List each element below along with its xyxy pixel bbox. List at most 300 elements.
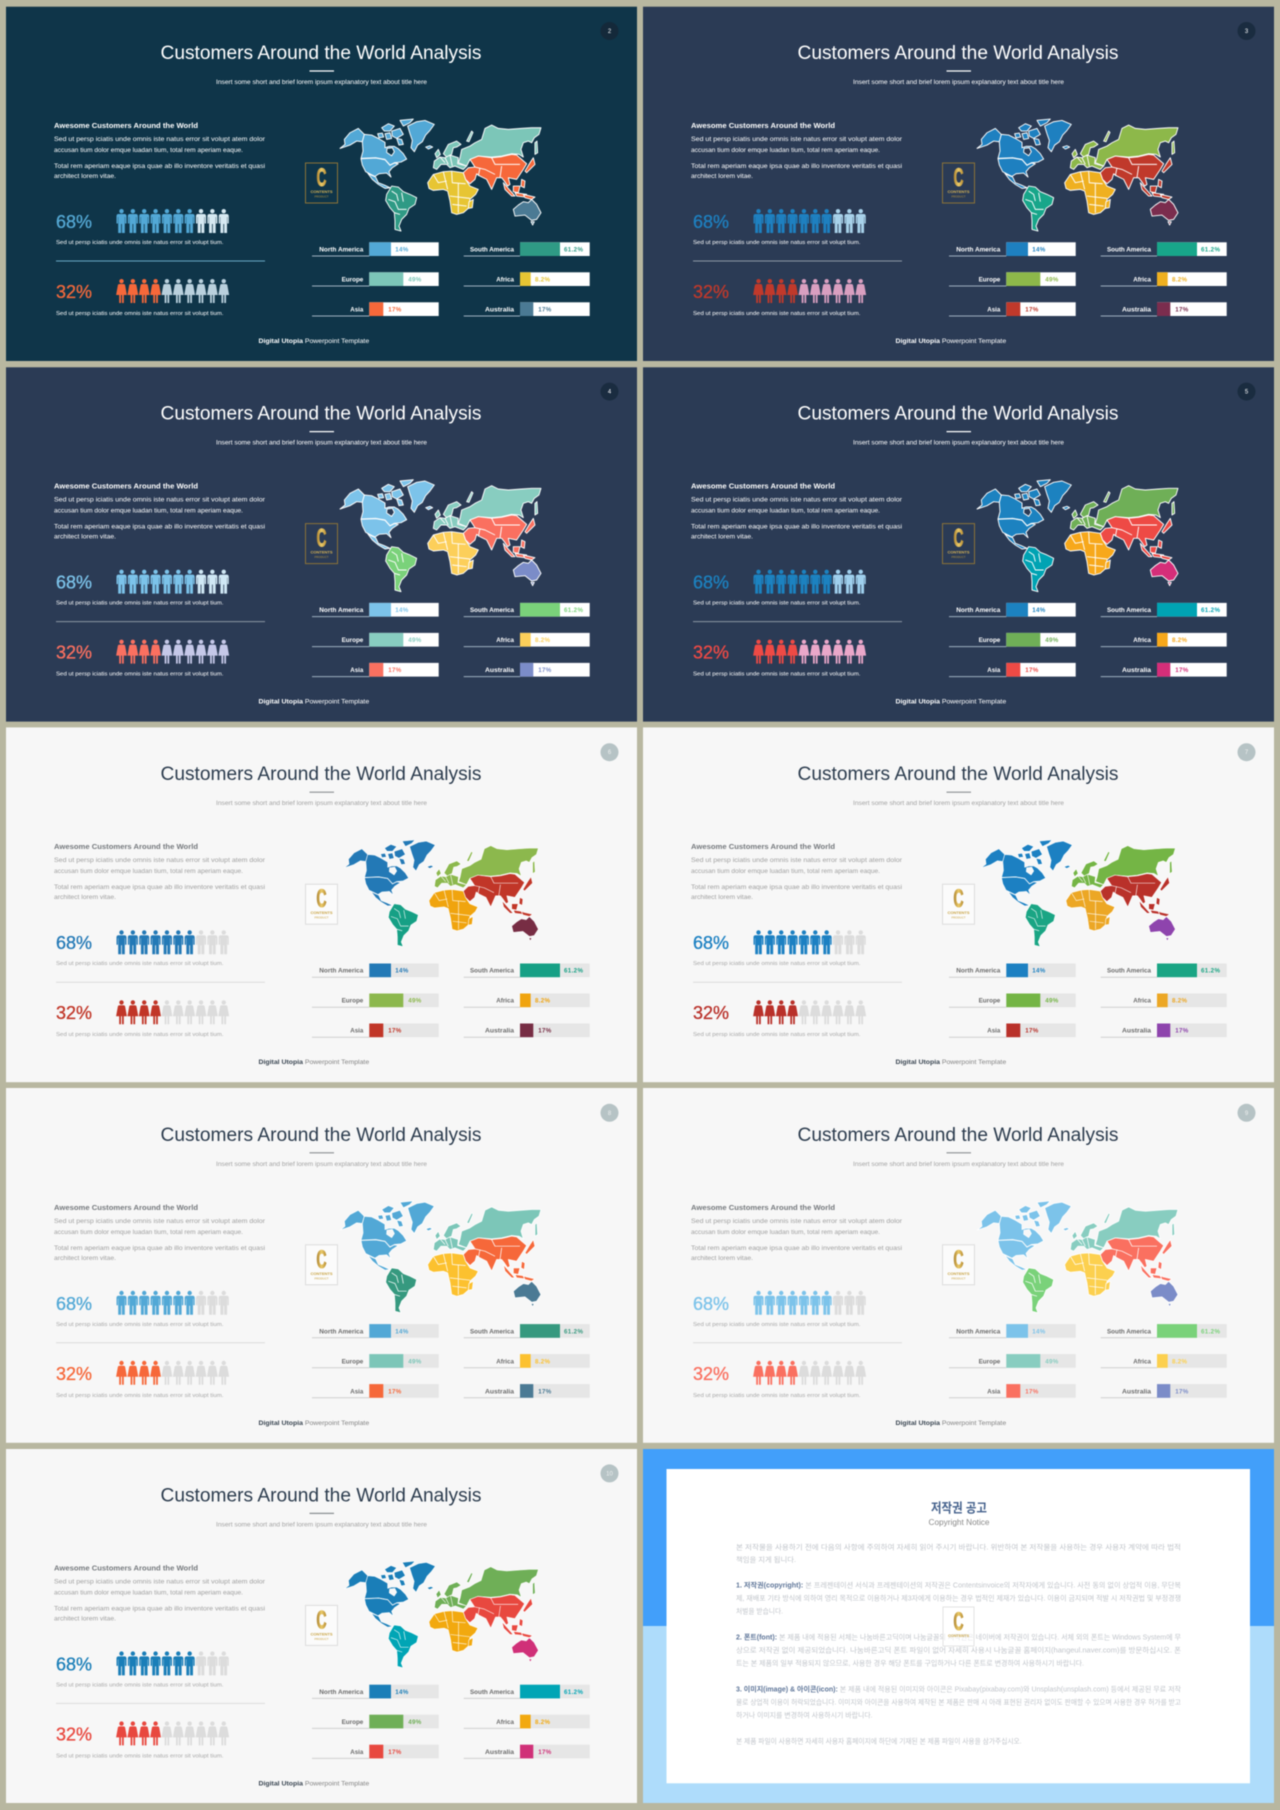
bar: Africa: 8.2% — [1172, 637, 1187, 644]
logo: CONTENTS — [948, 1271, 970, 1276]
bar: Asia: 17% — [388, 667, 402, 674]
world map — [344, 1561, 538, 1668]
bar: Europe — [949, 272, 1076, 286]
notice body: 물로 상업적 이용이 허락되었습니다. 이미지와 아이콘을 사용하여 제작된 본 제품은 판매 시 아래 표현된 권리자 없이도 판매할 수 있으며 사용한 경우 허가를 받고 — [736, 1697, 1182, 1706]
logo watermark: C — [954, 1608, 964, 1636]
caption: Sed ut persp iciatis unde omnis iste natus error sit volupt tium. — [56, 1032, 224, 1038]
bar: North America: North America — [319, 1328, 364, 1335]
footer: Digital Utopia Powerpoint Template — [896, 1059, 1007, 1066]
bar: Europe: Europe — [342, 637, 364, 644]
footer: Digital Utopia Powerpoint Template — [896, 1420, 1007, 1427]
text block: architect lorem vitae. — [54, 1616, 116, 1622]
bar: North America — [312, 964, 439, 977]
logo: PRODUCT — [314, 194, 329, 198]
bar: North America — [949, 242, 1076, 256]
bar: Asia: Asia — [350, 1388, 364, 1395]
text block — [54, 482, 265, 541]
page number: 10 — [606, 1471, 613, 1477]
text block — [691, 842, 902, 901]
logo: CONTENTS — [310, 910, 333, 915]
subtitle: Insert some short and brief lorem ipsum explanatory text about title here — [216, 800, 428, 807]
notice body: 처벌을 받습니다. — [736, 1607, 783, 1616]
text block: Total rem aperiam eaque ipsa quae ab illo inventore veritatis et quasi — [54, 1606, 265, 1612]
notice body: 제, 재배포 기타 방식에 의하여 영리 목적으로 이용하거나 제3자에게 이용하는 경우 법적인 제재가 있습니다. 이용이 금지되며 적발 시 저작권법 및 부정경쟁 — [736, 1594, 1181, 1603]
bar: Europe: Europe — [342, 1358, 364, 1365]
stat: 68%: 68% — [56, 932, 92, 953]
text block: Awesome Customers Around the World — [54, 482, 198, 491]
title: Customers Around the World Analysis — [798, 43, 1118, 64]
logo: PRODUCT — [952, 1276, 966, 1280]
bar: Europe: 49% — [1045, 998, 1059, 1005]
bar: South America: South America — [470, 1328, 514, 1335]
caption: Sed ut persp iciatis unde omnis iste natus error sit volupt tium. — [56, 601, 224, 607]
bar: Europe — [949, 1354, 1076, 1368]
logo: CONTENTS — [948, 910, 970, 915]
bar: Europe — [312, 1715, 439, 1728]
stat: 68%: 68% — [56, 1653, 92, 1674]
bar: South America: 61.2% — [564, 607, 583, 614]
world map — [981, 840, 1175, 947]
bar: North America: North America — [956, 968, 1001, 975]
world map — [340, 119, 541, 231]
title rule — [310, 70, 334, 72]
stat: 32%: 32% — [693, 642, 729, 663]
page number — [600, 1464, 618, 1482]
bar: Africa: Africa — [496, 1719, 514, 1726]
text block: architect lorem vitae. — [691, 1256, 753, 1262]
bar: Africa — [464, 994, 590, 1007]
page number — [600, 1104, 618, 1122]
bar: Africa: Africa — [1133, 1358, 1151, 1365]
bar: Africa: 8.2% — [535, 637, 550, 644]
subtitle: Insert some short and brief lorem ipsum explanatory text about title here — [216, 1161, 428, 1168]
text block — [691, 121, 902, 180]
logo — [306, 524, 338, 564]
bar: Australia: 17% — [538, 306, 552, 314]
logo: C — [954, 164, 964, 192]
stat: 68%: 68% — [56, 1293, 92, 1314]
subtitle: Insert some short and brief lorem ipsum explanatory text about title here — [853, 1161, 1065, 1168]
icon row: men — [754, 570, 866, 594]
bar: North America: North America — [956, 607, 1001, 614]
notice body: 1. 저작권(copyright): 본 프레젠테이션 서식과 프레젠테이션의 저작권은 Contentsinvoice의 저작자에게 있습니다. 사전 동의 없이 상업적 이용, 무단복 — [736, 1581, 1182, 1590]
title rule — [946, 70, 971, 72]
bar: South America: 61.2% — [1201, 607, 1220, 614]
text block: accusan tium dolor emque luadan tium, total rem aperiam eaque. — [54, 148, 243, 154]
stat: 32%: 32% — [56, 1363, 92, 1384]
bar: South America — [1101, 1324, 1227, 1338]
bar: Australia: 17% — [1175, 306, 1189, 314]
text block: Awesome Customers Around the World — [691, 482, 835, 491]
bar: North America: North America — [319, 1689, 364, 1696]
bar: Australia: 17% — [538, 1388, 552, 1395]
bar: Europe — [312, 1354, 439, 1368]
bar: Australia: Australia — [485, 1749, 514, 1756]
bar: Africa — [1101, 994, 1227, 1007]
logo: PRODUCT — [314, 555, 329, 559]
panel: slide 8 — [6, 1088, 637, 1443]
page number — [600, 383, 618, 401]
bar: South America — [464, 242, 590, 256]
caption: Sed ut persp iciatis unde omnis iste natus error sit volupt tium. — [56, 1753, 224, 1759]
bar: Asia — [312, 1384, 439, 1398]
page number — [1238, 1104, 1256, 1122]
bar: Africa: Africa — [496, 1358, 514, 1365]
bar: Europe: 49% — [1045, 276, 1059, 284]
bar: Australia: Australia — [485, 1388, 514, 1395]
bar: Asia: 17% — [388, 1028, 402, 1035]
bar: Asia — [312, 1745, 439, 1758]
subtitle: Insert some short and brief lorem ipsum explanatory text about title here — [216, 440, 428, 447]
text block: Awesome Customers Around the World — [54, 1563, 198, 1572]
text block — [54, 1203, 265, 1262]
world map — [344, 840, 538, 947]
icon row: women — [116, 1000, 229, 1024]
bar: Asia: 17% — [1025, 1028, 1039, 1035]
title rule — [946, 791, 971, 793]
bar: South America: 61.2% — [564, 246, 583, 254]
logo: C — [954, 1246, 964, 1274]
bar: South America: South America — [470, 968, 514, 975]
text block: Sed ut persp iciatis unde omnis iste natus error sit volupt atem dolor — [691, 137, 902, 143]
logo: PRODUCT — [952, 916, 966, 920]
panel: slide 2 — [6, 7, 637, 361]
bar: Australia: 17% — [1175, 1388, 1189, 1395]
bar: Asia — [312, 1024, 439, 1037]
bar: South America: 61.2% — [564, 1689, 583, 1696]
caption: Sed ut persp iciatis unde omnis iste natus error sit volupt tium. — [693, 672, 861, 678]
bar: South America: South America — [1107, 968, 1151, 975]
bar: Europe — [949, 994, 1076, 1007]
bar: Australia: Australia — [1122, 306, 1151, 314]
page number: 3 — [1245, 29, 1249, 35]
logo: CONTENTS — [310, 550, 333, 555]
bar: Australia: Australia — [485, 1028, 514, 1035]
icon row: men — [754, 930, 866, 954]
text block: Sed ut persp iciatis unde omnis iste natus error sit volupt atem dolor — [691, 858, 902, 864]
bar: Australia — [464, 1745, 590, 1758]
text block: accusan tium dolor emque luadan tium, total rem aperiam eaque. — [691, 148, 880, 154]
bar: South America: South America — [1107, 607, 1151, 614]
icon row: men — [116, 930, 229, 954]
stat: 32%: 32% — [56, 1723, 92, 1744]
bar: Africa: Africa — [1133, 276, 1151, 284]
icon row: women — [753, 640, 866, 664]
text block: Sed ut persp iciatis unde omnis iste natus error sit volupt atem dolor — [54, 858, 265, 864]
text block: accusan tium dolor emque luadan tium, total rem aperiam eaque. — [691, 509, 880, 515]
logo — [942, 1245, 974, 1285]
text block: accusan tium dolor emque luadan tium, total rem aperiam eaque. — [54, 1230, 243, 1236]
bar: Africa: 8.2% — [535, 1719, 550, 1726]
slide background — [643, 1088, 1274, 1443]
bar: Europe: 49% — [408, 1358, 422, 1365]
text block: Total rem aperiam eaque ipsa quae ab illo inventore veritatis et quasi — [54, 885, 265, 891]
logo: CONTENTS — [310, 1631, 333, 1636]
bar: Europe — [312, 272, 439, 286]
bar: Europe: Europe — [342, 998, 364, 1005]
bar: Africa: Africa — [496, 998, 514, 1005]
page number — [1238, 383, 1256, 401]
text block: architect lorem vitae. — [54, 1256, 116, 1262]
bar: North America: North America — [319, 607, 364, 614]
title: Customers Around the World Analysis — [160, 1485, 482, 1506]
text block — [691, 482, 902, 541]
page number: 5 — [1245, 390, 1249, 396]
bar: Australia: Australia — [1122, 1028, 1151, 1035]
bar: Asia: Asia — [987, 306, 1001, 314]
bar: North America: North America — [956, 246, 1001, 254]
bar: Europe — [312, 994, 439, 1007]
stat: 32%: 32% — [56, 642, 92, 663]
caption: Sed ut persp iciatis unde omnis iste natus error sit volupt tium. — [56, 1322, 224, 1328]
bar: North America — [312, 1685, 439, 1698]
bar: Europe: 49% — [408, 1719, 422, 1726]
footer: Digital Utopia Powerpoint Template — [896, 338, 1007, 345]
bar: Asia — [949, 1384, 1076, 1398]
text block: Awesome Customers Around the World — [691, 121, 835, 130]
logo: C — [316, 164, 326, 192]
text block: architect lorem vitae. — [54, 535, 116, 541]
icon row: women — [116, 1721, 229, 1745]
bar: Africa: 8.2% — [535, 998, 550, 1005]
bar: Asia: Asia — [987, 667, 1001, 674]
icon row: women — [116, 1361, 229, 1385]
notice body: 트는 본 제품의 일부 적용되지 않으므로, 사용한 경우 해당 폰트를 구입하거나 다른 폰트로 변경하여 사용하시기 바랍니다. — [736, 1658, 1084, 1667]
logo watermark: CONTENTS — [948, 1633, 969, 1638]
caption: Sed ut persp iciatis unde omnis iste natus error sit volupt tium. — [56, 240, 224, 246]
title: Customers Around the World Analysis — [160, 43, 482, 64]
bar: South America — [464, 964, 590, 977]
bar: North America: North America — [319, 246, 364, 254]
title rule — [310, 431, 334, 433]
title rule — [946, 1152, 971, 1154]
bar: Africa — [1101, 1354, 1227, 1368]
panel: slide 10 — [6, 1449, 637, 1803]
text block: Sed ut persp iciatis unde omnis iste natus error sit volupt atem dolor — [54, 498, 265, 504]
notice body: 책임을 지게 됩니다. — [736, 1555, 796, 1564]
bar: Africa — [1101, 633, 1227, 647]
text block: Sed ut persp iciatis unde omnis iste natus error sit volupt atem dolor — [54, 1219, 265, 1225]
panel: slide 7 — [643, 727, 1274, 1082]
logo — [306, 1245, 338, 1285]
bar: Australia: Australia — [485, 667, 514, 674]
slide background — [6, 727, 637, 1082]
footer: Digital Utopia Powerpoint Template — [258, 699, 370, 706]
bar: Asia — [949, 302, 1076, 316]
page number — [1238, 743, 1256, 761]
icon row: men — [116, 209, 229, 233]
stat: 68%: 68% — [56, 572, 92, 593]
logo — [942, 524, 974, 564]
logo: C — [954, 885, 964, 913]
icon row: men — [116, 570, 229, 594]
logo: C — [316, 1606, 326, 1634]
bar: Australia: Australia — [1122, 667, 1151, 674]
bar: North America: 14% — [395, 246, 409, 254]
slide background — [643, 727, 1274, 1082]
stat: 68%: 68% — [693, 1293, 729, 1314]
logo: C — [954, 525, 964, 553]
page number — [1238, 22, 1256, 40]
bar: Asia — [312, 663, 439, 677]
bar: North America: 14% — [395, 1328, 409, 1335]
notice heading: 저작권 공고 — [931, 1501, 987, 1516]
bar: Asia — [312, 302, 439, 316]
notice body: 본 제품 파일이 사용하면 자세히 사용자 홈페이지에 하단에 기재된 본 제품 파일이 사용을 삼가주십시오. — [736, 1737, 1022, 1746]
logo: C — [316, 885, 326, 913]
bar: Australia: Australia — [485, 306, 514, 314]
subtitle: Insert some short and brief lorem ipsum explanatory text about title here — [216, 1521, 428, 1528]
bar: Australia — [1101, 663, 1227, 677]
bar: North America: 14% — [395, 968, 409, 975]
bar: Europe: 49% — [408, 637, 422, 644]
bar: North America: 14% — [395, 607, 409, 614]
text block: accusan tium dolor emque luadan tium, total rem aperiam eaque. — [54, 869, 243, 875]
bar: Australia: 17% — [1175, 667, 1189, 674]
text block — [691, 1203, 902, 1262]
icon row: men — [116, 1651, 229, 1675]
bar: South America: South America — [470, 607, 514, 614]
panel: slide 5 — [643, 367, 1274, 722]
text block: Sed ut persp iciatis unde omnis iste natus error sit volupt atem dolor — [691, 1219, 902, 1225]
caption: Sed ut persp iciatis unde omnis iste natus error sit volupt tium. — [693, 240, 861, 246]
title rule — [310, 1512, 334, 1514]
bar: Asia — [949, 663, 1076, 677]
bar: Africa: 8.2% — [535, 276, 550, 284]
text block: Total rem aperiam eaque ipsa quae ab illo inventore veritatis et quasi — [54, 525, 265, 531]
title rule — [946, 431, 971, 433]
world map — [977, 480, 1178, 592]
slide background — [6, 7, 637, 361]
caption: Sed ut persp iciatis unde omnis iste natus error sit volupt tium. — [56, 1393, 224, 1399]
notice body: 본 저작물을 사용하기 전에 다음의 사항에 주의하여 자세히 읽어 주시기 바랍니다. 위반하여 본 저작물을 사용하는 경우 사용자 계약에 따라 법적 — [736, 1542, 1181, 1551]
caption: Sed ut persp iciatis unde omnis iste natus error sit volupt tium. — [56, 961, 224, 967]
bar: Australia: 17% — [1175, 1028, 1189, 1035]
bar: South America — [464, 603, 590, 617]
logo: C — [316, 1246, 326, 1274]
bar: Australia — [464, 1024, 590, 1037]
bar: Europe — [949, 633, 1076, 647]
bar: Europe: 49% — [408, 998, 422, 1005]
icon row: men — [116, 1291, 229, 1315]
notice body: 2. 폰트(font): 본 제품 내에 적용된 서체는 나눔바른고딕이며 나눔글꼴의 저작권은 네이버에 저작권이 있습니다. 서체 외의 폰트는 Windows System에 무 — [736, 1632, 1182, 1641]
logo — [942, 163, 974, 203]
world map — [977, 1201, 1178, 1313]
text block: Awesome Customers Around the World — [691, 842, 835, 851]
logo: PRODUCT — [314, 916, 329, 920]
logo — [306, 884, 338, 924]
bar: Australia: 17% — [538, 1749, 552, 1756]
logo: PRODUCT — [952, 194, 966, 198]
notice body: 3. 이미지(image) & 아이콘(icon): 본 제품 내에 적용된 이미지와 아이콘은 Pixabay(pixabay.com)와 Unsplash(unsplash.com) 등에서 제공된 무료 저작 — [736, 1685, 1182, 1694]
bar: Asia: Asia — [350, 1028, 364, 1035]
bar: South America: South America — [1107, 246, 1151, 254]
icon row: women — [753, 1000, 866, 1024]
footer: Digital Utopia Powerpoint Template — [258, 1780, 370, 1787]
caption: Sed ut persp iciatis unde omnis iste natus error sit volupt tium. — [693, 601, 861, 607]
icon row: men — [754, 209, 866, 233]
bar: Africa: Africa — [1133, 637, 1151, 644]
title rule — [310, 1152, 334, 1154]
bar: Asia: Asia — [987, 1028, 1001, 1035]
subtitle: Insert some short and brief lorem ipsum explanatory text about title here — [853, 79, 1065, 86]
page number: 6 — [608, 750, 612, 756]
bar: South America: South America — [470, 1689, 514, 1696]
bar: North America: 14% — [395, 1689, 409, 1696]
bar: Africa: 8.2% — [1172, 1358, 1187, 1365]
logo: CONTENTS — [948, 189, 970, 194]
panel: slide 6 — [6, 727, 637, 1082]
stat: 32%: 32% — [56, 281, 92, 302]
caption: Sed ut persp iciatis unde omnis iste natus error sit volupt tium. — [693, 961, 861, 967]
icon row: women — [753, 1361, 866, 1385]
title: Customers Around the World Analysis — [160, 1125, 482, 1146]
text block: Total rem aperiam eaque ipsa quae ab illo inventore veritatis et quasi — [691, 885, 902, 891]
caption: Sed ut persp iciatis unde omnis iste natus error sit volupt tium. — [56, 672, 224, 678]
bar: Europe: Europe — [342, 1719, 364, 1726]
text block: architect lorem vitae. — [691, 535, 753, 541]
bar: Australia — [1101, 1384, 1227, 1398]
text block: Total rem aperiam eaque ipsa quae ab illo inventore veritatis et quasi — [54, 1246, 265, 1252]
bar: Africa — [464, 633, 590, 647]
text block: Total rem aperiam eaque ipsa quae ab illo inventore veritatis et quasi — [691, 164, 902, 170]
bar: South America: 61.2% — [1201, 246, 1220, 254]
bar: South America — [464, 1324, 590, 1338]
page number: 7 — [1245, 750, 1249, 756]
bar: Europe: 49% — [1045, 1358, 1059, 1365]
page number: 2 — [608, 29, 612, 35]
bar: North America: North America — [319, 968, 364, 975]
caption: Sed ut persp iciatis unde omnis iste natus error sit volupt tium. — [693, 1393, 861, 1399]
logo: PRODUCT — [952, 555, 966, 559]
stat: 32%: 32% — [693, 281, 729, 302]
stat: 68%: 68% — [693, 932, 729, 953]
title: Customers Around the World Analysis — [160, 764, 482, 785]
notice body: 상으로 저작권 없이 제공되었습니다. 나눔바른고딕 폰트 파일이 없어 자세히 사용시 나눔글꼴 홈페이지(hangeul.naver.com)를 방문하십시오. 폰 — [736, 1645, 1182, 1654]
text block: Total rem aperiam eaque ipsa quae ab illo inventore veritatis et quasi — [691, 525, 902, 531]
text block: Awesome Customers Around the World — [54, 121, 198, 130]
icon row: women — [116, 279, 229, 303]
bar: Africa: Africa — [496, 276, 514, 284]
stat: 68%: 68% — [693, 211, 729, 232]
bar: South America — [1101, 603, 1227, 617]
caption: Sed ut persp iciatis unde omnis iste natus error sit volupt tium. — [56, 311, 224, 317]
logo — [306, 163, 338, 203]
text block: Awesome Customers Around the World — [691, 1203, 835, 1212]
text block — [54, 842, 265, 901]
bar: Africa — [464, 272, 590, 286]
slide background — [6, 367, 637, 722]
bar: Africa: Africa — [496, 637, 514, 644]
footer: Digital Utopia Powerpoint Template — [258, 338, 370, 345]
bar: Africa: 8.2% — [535, 1358, 550, 1365]
icon row: women — [116, 640, 229, 664]
title: Customers Around the World Analysis — [160, 404, 482, 425]
bar: Asia — [949, 1024, 1076, 1037]
text block: accusan tium dolor emque luadan tium, total rem aperiam eaque. — [54, 509, 243, 515]
icon row: men — [754, 1291, 866, 1315]
bar: Asia: 17% — [388, 1749, 402, 1756]
bar: Africa — [464, 1715, 590, 1728]
slide background — [643, 7, 1274, 361]
bar: Europe: Europe — [979, 276, 1001, 284]
bar: North America — [949, 603, 1076, 617]
bar: Europe: 49% — [408, 276, 422, 284]
logo: CONTENTS — [948, 550, 970, 555]
bar: Asia: Asia — [350, 306, 364, 314]
bar: Australia — [464, 663, 590, 677]
text block: accusan tium dolor emque luadan tium, total rem aperiam eaque. — [54, 1590, 243, 1596]
